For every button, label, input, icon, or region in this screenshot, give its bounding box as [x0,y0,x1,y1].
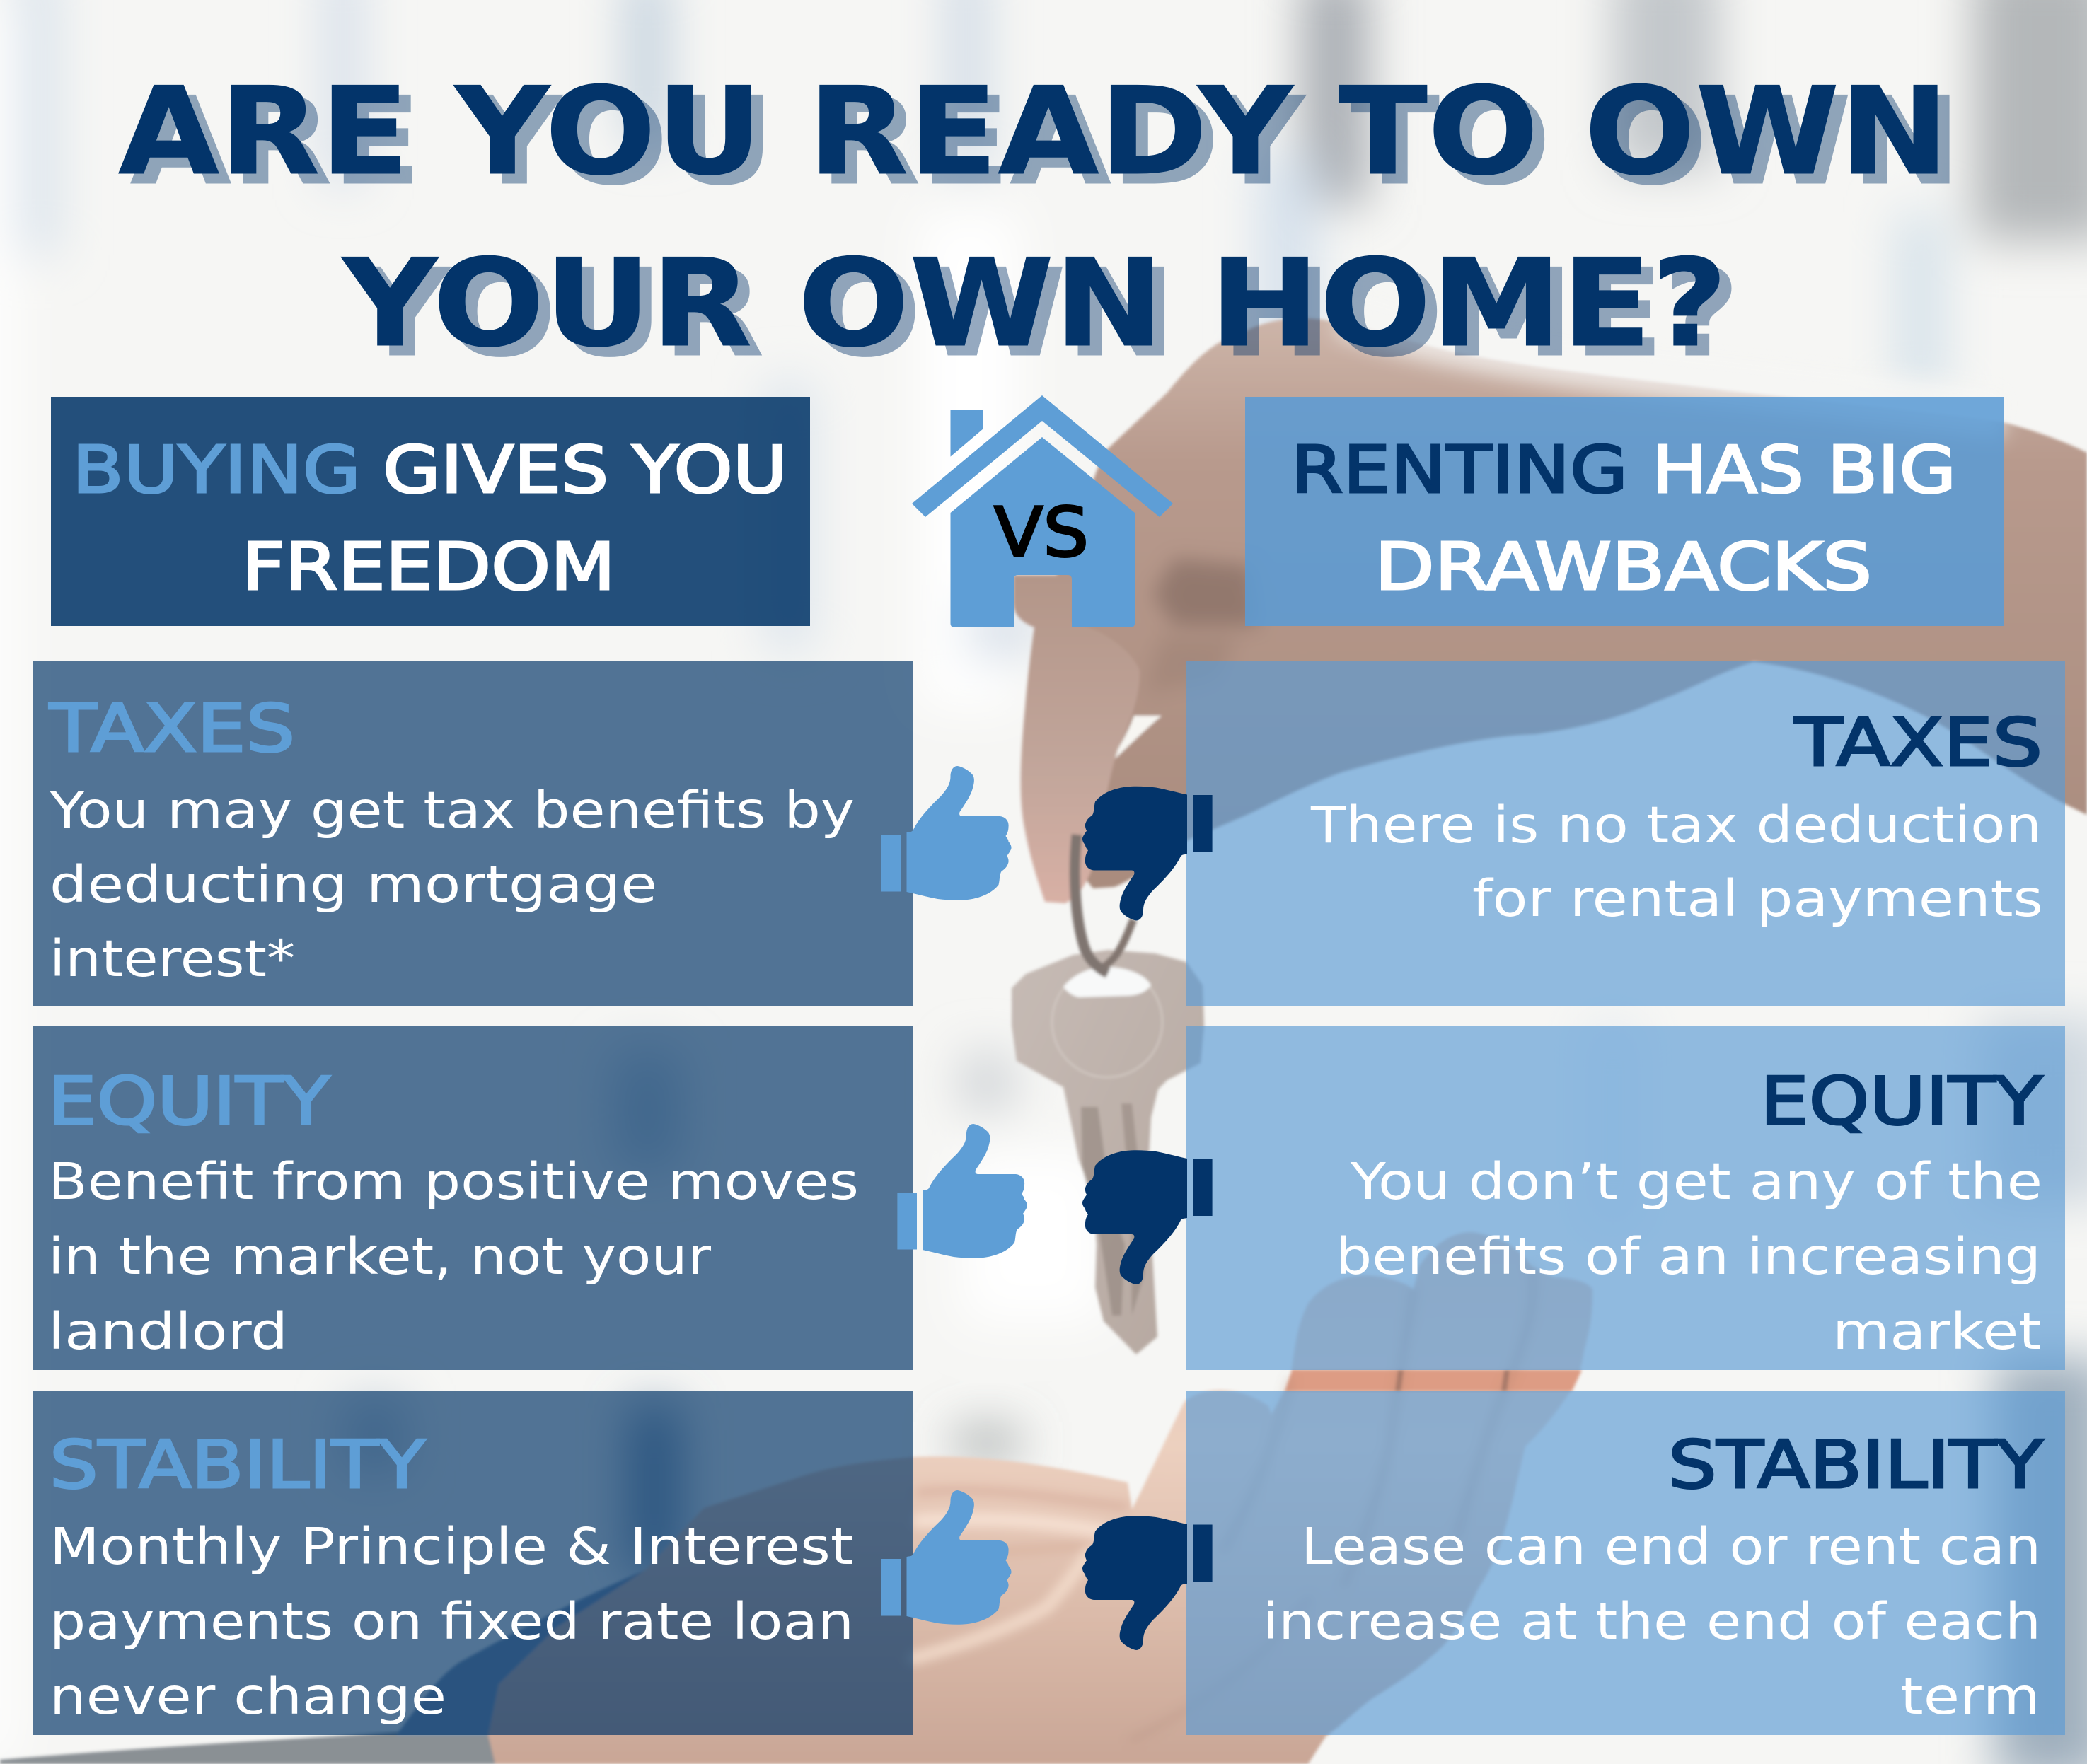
thumb [1013,575,1140,903]
lower hand [488,1232,1592,1764]
text: taxes benefit: You may get tax benefits by [49,781,855,840]
header text: renting has big drawbacks: RENTING [1291,432,1628,508]
title shadow: ARE YOU READY TO OWN [130,71,1961,212]
text: stability benefit: never change [50,1667,446,1726]
header: buying [51,397,810,626]
heading: equity: EQUITY [48,1063,330,1139]
text: taxes drawback [1310,796,2043,928]
text: taxes drawback: There is no tax deduction [1310,796,2042,854]
panel: buying stability [33,1391,913,1735]
header text: renting has big drawbacks [1291,432,1956,605]
text: taxes drawback: for rental payments [1472,869,2043,928]
gap between thumb and finger [1109,716,1162,765]
icon: thumbs down taxes [1082,787,1213,921]
heading: taxes: TAXES [1794,704,2042,781]
text: equity benefit: landlord [48,1302,288,1361]
icon: house with VS [912,395,1173,627]
header text: buying gives you freedom: FREEDOM [242,529,615,605]
title shadow [130,71,1961,384]
title [118,62,1961,384]
fingers strip between panels [1285,1370,1582,1391]
title text: ARE YOU READY TO OWN [118,62,1949,202]
header text: renting has big drawbacks: DRAWBACKS [1375,529,1872,605]
icon: thumbs up stability [881,1490,1012,1625]
heading: equity: EQUITY [1760,1063,2042,1139]
header: renting [1245,397,2004,626]
upper hand [1033,318,2087,888]
heading: stability: STABILITY [1668,1427,2043,1503]
text: equity drawback: market [1832,1302,2042,1361]
text: stability benefit [50,1517,854,1726]
text: taxes benefit: interest* [50,929,295,988]
panel: buying equity [33,1026,913,1370]
heading: stability: STABILITY [50,1427,425,1503]
text: equity drawback [1336,1152,2042,1361]
header text: buying gives you freedom [72,432,787,605]
faded upper edge of hand [1344,311,2004,414]
text: equity drawback: You don’t get any of the [1350,1152,2042,1211]
panel: renting taxes [1186,661,2065,1006]
title text: YOUR OWN HOME? [341,233,1728,374]
heading: taxes: TAXES [49,690,295,767]
key ring [1075,835,1108,973]
text: stability drawback: increase at the end of each [1263,1592,2041,1651]
icon: house with VS: VS [994,493,1089,572]
header text: renting has big drawbacks: HAS BIG [1652,432,1956,508]
text: taxes benefit [49,781,855,988]
panel: renting equity [1186,1026,2065,1370]
text: stability benefit: payments on fixed rate loan [50,1592,854,1651]
header text: buying gives you freedom: BUYING [72,432,361,508]
text: equity benefit: Benefit from positive moves [48,1152,859,1211]
title text [118,62,1949,374]
key [1012,950,1204,1354]
header text: buying gives you freedom: GIVES YOU [383,432,787,508]
text: stability drawback: Lease can end or rent can [1301,1517,2041,1576]
panel: renting stability [1186,1391,2065,1735]
hand shadow [1153,559,1259,626]
text: stability drawback: term [1900,1667,2040,1726]
icon: thumbs up taxes [881,766,1012,900]
lower sleeve [0,1726,495,1764]
icon: thumbs down stability [1082,1516,1213,1650]
text: stability benefit: Monthly Principle & Interest [50,1517,853,1576]
text: equity benefit [48,1152,859,1361]
panel: buying taxes [33,661,913,1006]
text: taxes benefit: deducting mortgage [50,855,657,914]
palm creases [913,1266,1533,1740]
title shadow: YOUR OWN HOME? [353,243,1740,384]
text: equity benefit: in the market, not your [48,1227,712,1286]
icon: thumbs down equity [1082,1150,1213,1284]
icon: thumbs up equity [897,1124,1027,1258]
text: stability drawback [1263,1517,2041,1726]
text: equity drawback: benefits of an increasing [1336,1227,2041,1286]
